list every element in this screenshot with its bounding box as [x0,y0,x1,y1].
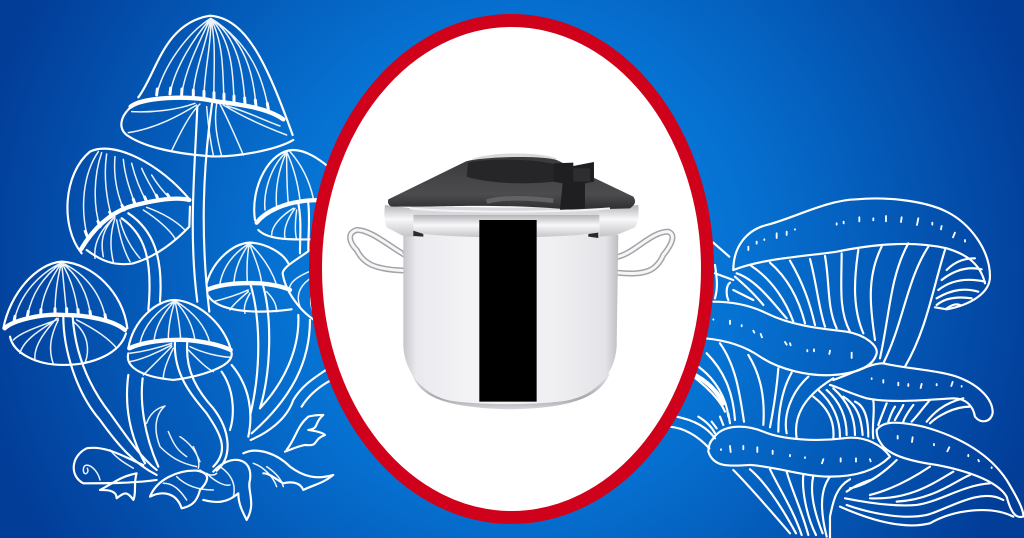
mushroom: left middle [67,149,190,310]
mushroom: top tall [121,16,293,312]
fifth lobe [877,423,1023,517]
pot collar band [413,215,599,237]
black strip [479,220,537,402]
second lobe [705,302,877,375]
mushroom: center right [207,243,310,433]
lid handle [467,160,553,183]
mushroom: center low [127,300,250,471]
mushroom: right behind oval [254,150,328,253]
collar shadows [413,231,598,238]
left handle [350,230,412,288]
pressure valve [553,162,594,210]
fourth lobe [708,427,890,477]
left mushroom cluster [3,16,338,520]
pot base rim [412,373,610,409]
mushroom: left low [3,262,157,475]
thick gill behind oval [695,375,723,403]
lid edge trim [410,208,610,212]
left clamp [384,205,414,237]
right clamp [599,205,639,237]
right oyster mushroom cluster [670,198,1023,538]
lid top highlight [472,153,557,163]
mushroom: partly hidden by oval [283,250,320,323]
stems lower right [251,365,338,440]
top gills [713,243,985,367]
pot body [403,235,618,404]
lid rim [410,205,603,215]
right handle [605,232,672,290]
bottom gills [733,460,1013,538]
red oval frame [316,20,708,518]
lid [388,157,635,210]
foliage at base [74,406,333,520]
middle gills [670,343,970,448]
third lobe [830,363,993,421]
lid centre reflection [487,198,553,202]
pressure cooker [350,153,672,409]
top cap [733,198,990,309]
